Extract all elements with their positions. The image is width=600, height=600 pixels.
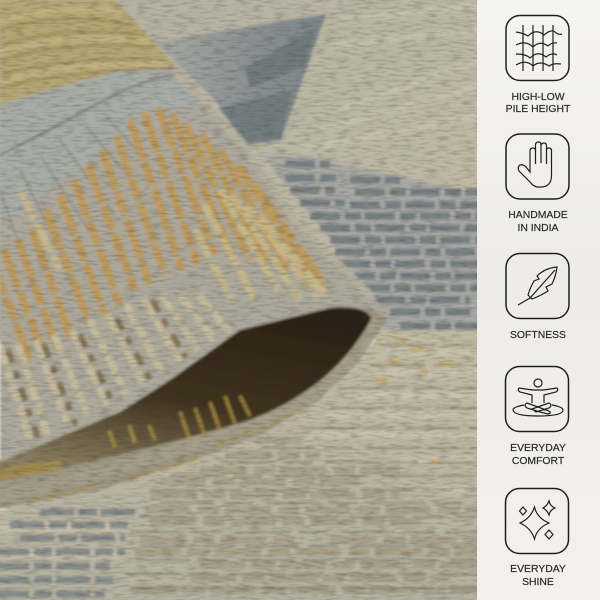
feature: handmade in India: [506, 134, 569, 234]
rug: paler yellow bars: [20, 190, 330, 300]
rug: band seam: [0, 75, 175, 155]
floor: tan pile bands: [130, 440, 485, 590]
rug underside gold stripes: [0, 396, 250, 478]
rug frayed gold edge: [30, 412, 300, 502]
feature: softness: [506, 254, 569, 341]
label: everyday shine: [510, 564, 566, 588]
label: everyday shine: SHINE: [522, 577, 554, 588]
icon: feather: [506, 254, 569, 318]
rug underside interior: [0, 307, 371, 482]
label: softness: SOFTNESS: [510, 330, 566, 341]
label: everyday comfort: EVERYDAY: [510, 443, 566, 454]
rug: blue-grey band: [1, 72, 199, 222]
label: handmade in India: IN INDIA: [518, 223, 559, 234]
label: high-low pile height: HIGH-LOW: [511, 92, 565, 103]
rug: top ochre section: [0, 0, 175, 105]
panel: feature sidebar: [477, 0, 600, 600]
floor: middle blue-grey field: [262, 155, 485, 335]
photo grain: [0, 0, 477, 600]
feature: high-low pile height: [506, 16, 571, 115]
floor: pale cream bands: [0, 352, 485, 555]
floor: dark pile lines: [125, 345, 485, 588]
floor: lower field: [0, 330, 485, 600]
rug edge binding: [188, 319, 374, 442]
label: high-low pile height: [506, 92, 571, 115]
floor: blue bars: [285, 164, 485, 326]
rug: underside with dark opening: [0, 292, 388, 510]
feature: everyday shine: [506, 488, 568, 588]
label: handmade in India: HANDMADE: [508, 210, 568, 221]
label: handmade in India: [508, 210, 568, 234]
icon: sparkles: [506, 488, 568, 554]
icon: hand: [506, 134, 569, 199]
feature: everyday comfort: [506, 366, 568, 467]
label: everyday comfort: COMFORT: [512, 456, 565, 467]
rug: right edge highlight: [175, 70, 372, 296]
rug: top face: [0, 0, 388, 462]
floor: upper grey-blue triangle: [155, 14, 326, 146]
label: high-low pile height: PILE HEIGHT: [506, 104, 571, 115]
label: everyday comfort: [510, 443, 566, 467]
rug: gold bars: [0, 108, 325, 360]
rug underside lip: [0, 292, 388, 510]
rug: ribs fan: [0, 115, 147, 252]
rug: ochre horizontal ribs: [0, 19, 172, 88]
floor: triangle dark patch: [218, 28, 316, 142]
icon: pile height: [506, 16, 569, 80]
floor: faint diagonal strokes: [300, 5, 480, 150]
rug: lower cream and brown bars: [0, 295, 230, 440]
floor: bottom-left blue strokes: [0, 512, 135, 594]
label: everyday shine: EVERYDAY: [510, 564, 566, 575]
icon: meditating figure: [506, 366, 568, 432]
floor: gold flecks: [375, 340, 454, 462]
floor: upper beige field: [0, 0, 485, 340]
